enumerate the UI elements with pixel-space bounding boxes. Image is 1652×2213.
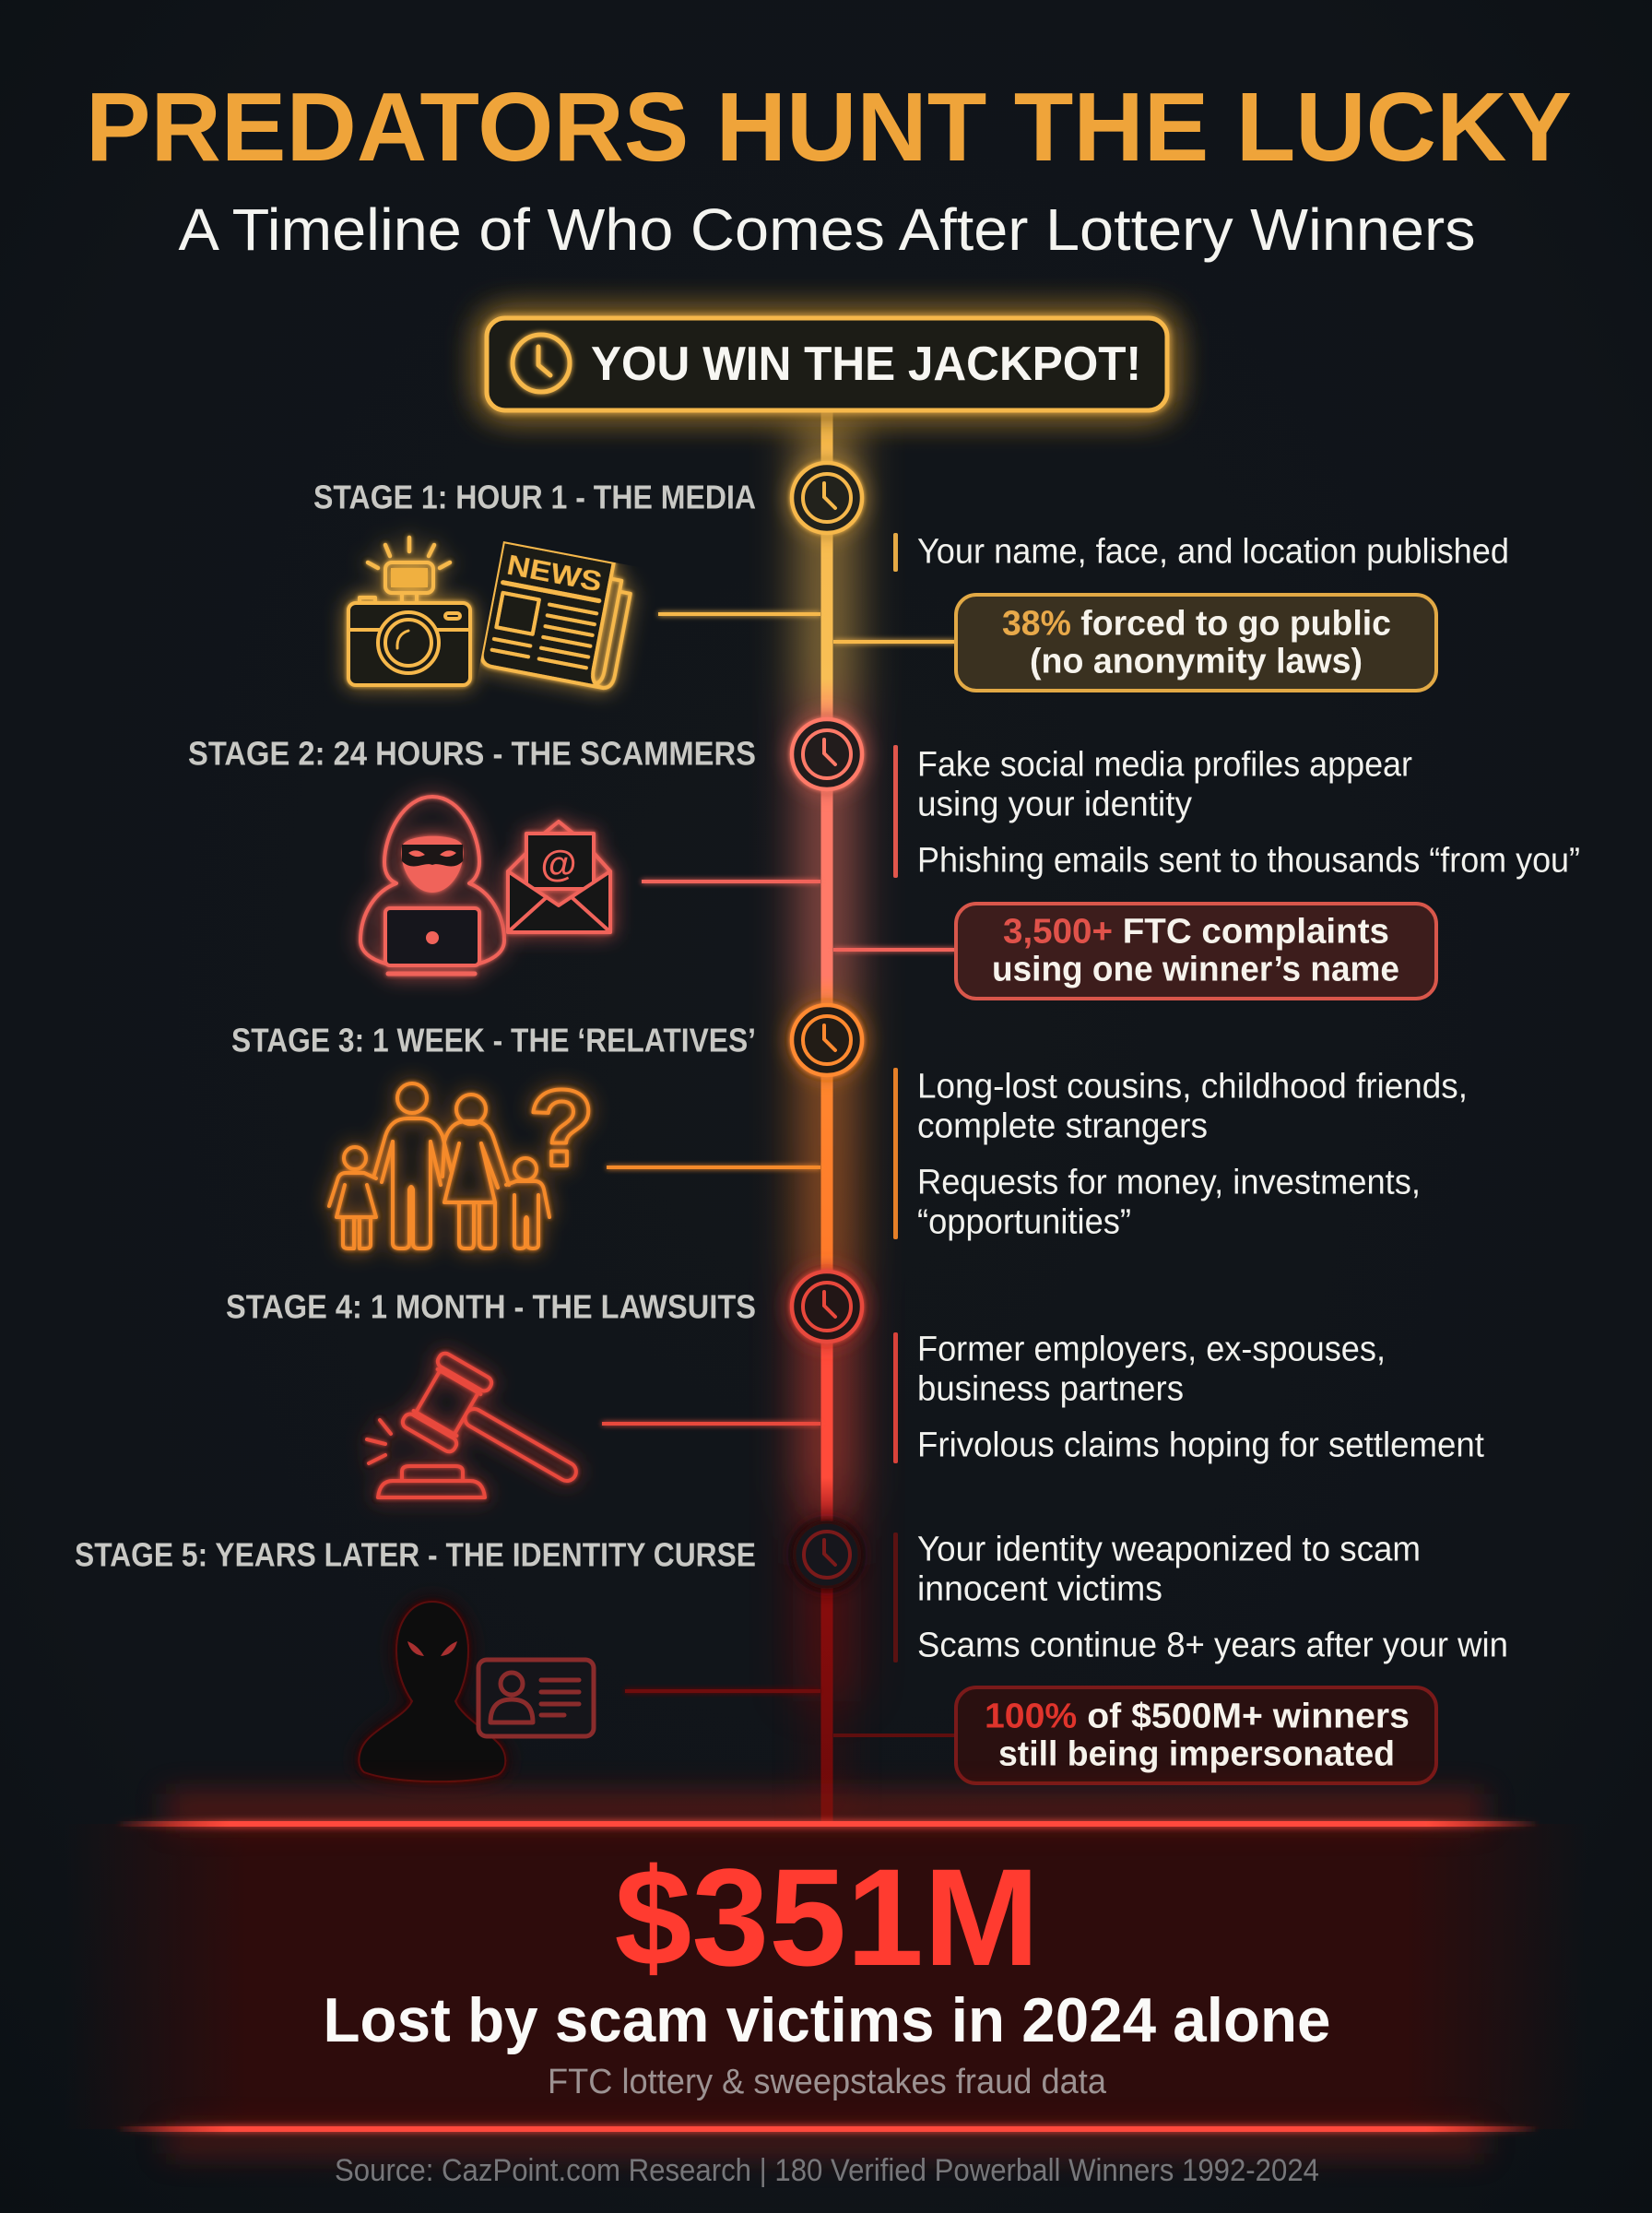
panel: stage 5	[75, 1522, 1508, 1783]
connector left	[602, 1422, 820, 1426]
connector right	[833, 948, 956, 952]
detail text: Frivolous claims hoping for settlement	[917, 1426, 1484, 1464]
title: PREDATORS HUNT THE LUCKY	[86, 73, 1572, 182]
jackpot banner	[487, 318, 1167, 410]
detail text: Long-lost cousins, childhood friends,	[917, 1068, 1468, 1106]
connector right	[833, 640, 956, 644]
subtitle: A Timeline of Who Comes After Lottery Winners	[179, 196, 1476, 263]
stage 1 label: STAGE 1: HOUR 1 - THE MEDIA	[313, 478, 756, 516]
callout: 100%: still being impersonated	[998, 1735, 1395, 1774]
icon: hacker	[360, 797, 504, 974]
callout: 3,500+: 3,500+ FTC complaints	[1003, 913, 1389, 952]
icon: jackpot clock	[513, 335, 570, 392]
detail text: Former employers, ex-spouses,	[917, 1330, 1386, 1368]
stage 4 label: STAGE 4: 1 MONTH - THE LAWSUITS	[226, 1287, 756, 1326]
connector left	[625, 1689, 820, 1693]
footer source: Source: CazPoint.com Research | 180 Verified Powerball Winners 1992-2024	[335, 2153, 1319, 2188]
callout: 3,500+: using one winner’s name	[992, 950, 1399, 988]
stage 1 node	[792, 463, 862, 533]
connector left	[642, 880, 820, 883]
detail text: “opportunities”	[917, 1202, 1131, 1241]
stage 3 label: STAGE 3: 1 WEEK - THE ‘RELATIVES’	[231, 1022, 756, 1059]
jackpot text: YOU WIN THE JACKPOT!	[591, 337, 1141, 391]
callout: 100%: 100% of $500M+ winners	[985, 1697, 1410, 1735]
stage 2 node	[792, 719, 862, 789]
stage 5 label: STAGE 5: YEARS LATER - THE IDENTITY CURSE	[75, 1536, 756, 1573]
callout: 38%: 38% forced to go public	[1002, 605, 1391, 644]
stage 4 node	[792, 1272, 862, 1342]
detail text: Requests for money, investments,	[917, 1164, 1421, 1202]
icon: envelope	[508, 822, 610, 932]
detail text	[893, 1330, 1484, 1464]
timeline spine	[793, 410, 861, 1824]
connector left	[658, 612, 820, 616]
icon: camera	[348, 538, 470, 685]
icon: id card	[478, 1660, 594, 1736]
icon: family with question mark	[329, 1068, 595, 1249]
callout: 100%	[956, 1687, 1436, 1783]
icon: newspaper: NEWS	[504, 549, 605, 598]
panel: stage 2	[188, 719, 1580, 999]
callout: 38%: (no anonymity laws)	[1030, 642, 1363, 680]
detail text: using your identity	[917, 786, 1192, 824]
detail text: innocent victims	[917, 1569, 1162, 1608]
detail text: Fake social media profiles appear	[917, 745, 1412, 784]
panel: stage 3	[231, 1005, 1468, 1249]
stage 3 node	[792, 1005, 862, 1075]
icon: newspaper	[480, 541, 635, 690]
detail text: Phishing emails sent to thousands “from you”	[917, 841, 1580, 880]
detail text: Your name, face, and location published	[917, 533, 1509, 572]
connector right	[833, 1734, 956, 1737]
stat caption: Lost by scam victims in 2024 alone	[323, 1985, 1331, 2055]
icon: gavel	[367, 1351, 596, 1513]
stat source: FTC lottery & sweepstakes fraud data	[548, 2063, 1107, 2101]
detail text	[893, 1531, 1508, 1665]
stage 5 node	[795, 1522, 859, 1587]
connector left	[607, 1166, 820, 1169]
detail text: Your identity weaponized to scam	[917, 1531, 1421, 1569]
detail text	[893, 745, 1580, 880]
icon: family with question mark: ?	[528, 1068, 595, 1189]
detail text: Scams continue 8+ years after your win	[917, 1627, 1508, 1665]
panel: bottom stat	[65, 1793, 1587, 2155]
icon: envelope: @	[540, 844, 577, 884]
detail text: business partners	[917, 1370, 1184, 1409]
callout: 3,500+	[956, 904, 1436, 999]
callout: 38%	[956, 595, 1436, 691]
stage 2 label: STAGE 2: 24 HOURS - THE SCAMMERS	[188, 734, 756, 773]
detail text	[893, 1068, 1468, 1241]
detail text: complete strangers	[917, 1106, 1208, 1145]
big number: $351M	[614, 1840, 1040, 1994]
panel: stage 4	[226, 1272, 1484, 1513]
icon: masked figure	[359, 1602, 505, 1781]
panel: stage 1	[313, 463, 1509, 691]
